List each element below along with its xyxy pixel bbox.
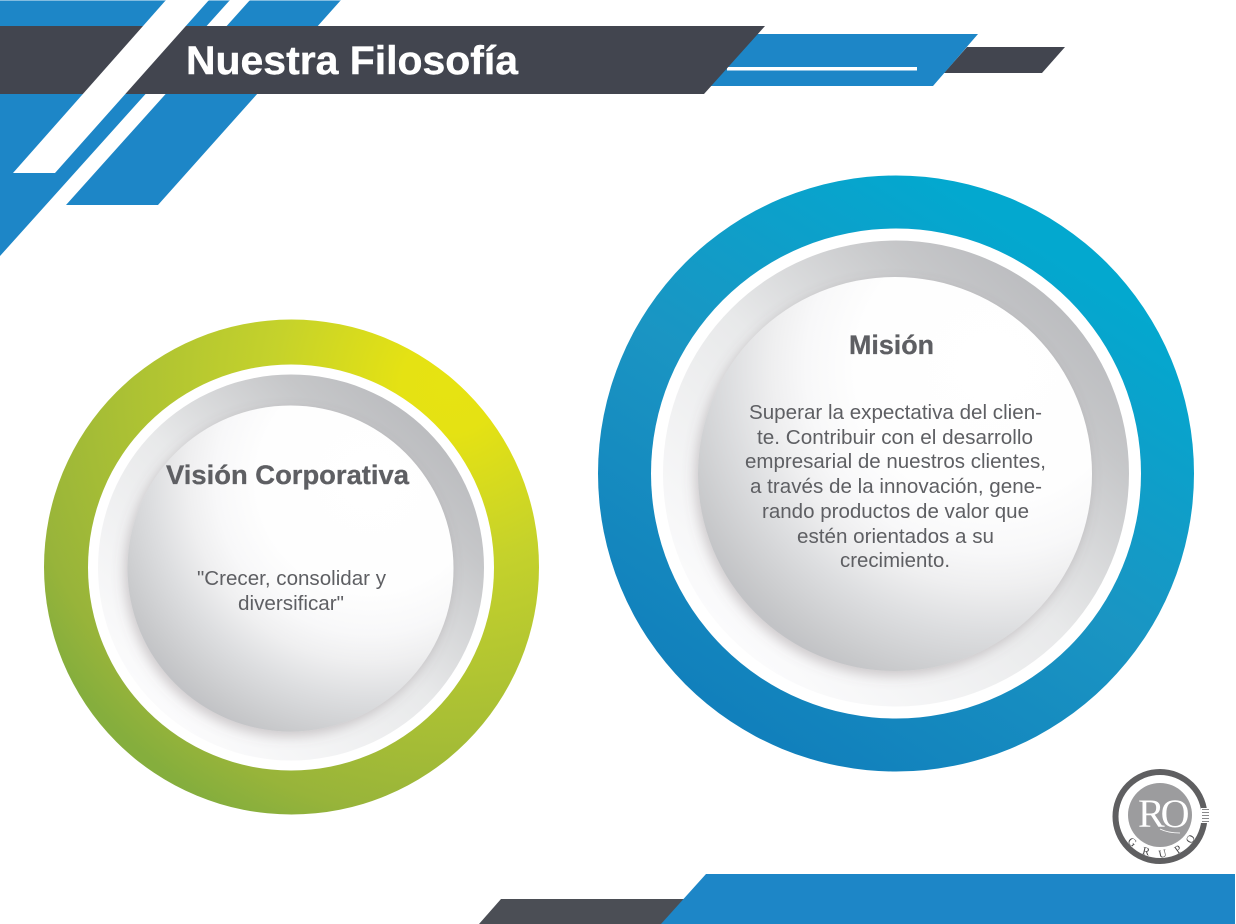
heading: vision: Visión Corporativa <box>166 460 410 490</box>
green gradient ring <box>44 320 539 814</box>
logo: RO Grupo: RO <box>1138 791 1189 836</box>
blue gradient ring <box>598 176 1194 772</box>
vision text: diversificar" <box>238 592 344 615</box>
white rim <box>88 364 494 770</box>
mision text: Superar la expectativa del clien- <box>749 401 1042 424</box>
logo: RO Grupo <box>1112 769 1209 864</box>
right header ribbons <box>706 34 1065 86</box>
mision text: a través de la innovación, gene- <box>750 475 1042 498</box>
panel: vision corporativa <box>44 320 539 814</box>
mision text: te. Contribuir con el desarrollo <box>757 426 1033 449</box>
vision text <box>197 567 387 615</box>
white rim <box>651 228 1141 718</box>
top-left blue diagonal shapes <box>0 0 341 256</box>
grey bevel ring <box>663 240 1129 706</box>
panel: mision <box>598 176 1194 772</box>
grey bevel ring <box>98 374 484 760</box>
logo: RO Grupo: GRUPO <box>1128 835 1194 858</box>
mision text <box>745 401 1046 572</box>
mision text: rando productos de valor que <box>762 500 1029 523</box>
mision text: crecimiento. <box>840 549 950 572</box>
mision text: estén orientados a su <box>797 525 994 548</box>
mision text: empresarial de nuestros clientes, <box>745 450 1046 473</box>
inner disc <box>128 406 454 732</box>
title banner: Nuestra Filosofía <box>186 39 519 83</box>
bottom ribbons <box>479 874 1235 924</box>
vision text: "Crecer, consolidar y <box>197 567 387 590</box>
title banner <box>0 0 765 173</box>
inner disc <box>698 277 1092 671</box>
heading: mision: Misión <box>849 330 934 360</box>
